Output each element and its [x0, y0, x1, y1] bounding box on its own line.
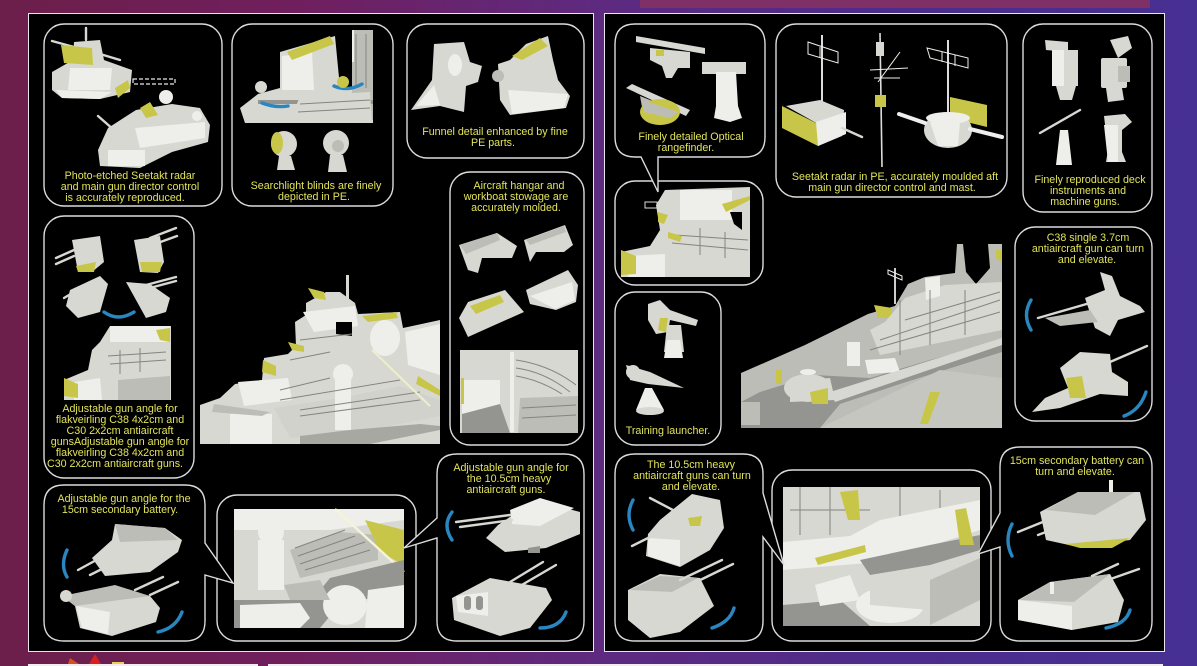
panel: C38 single 3.7cm gun	[1015, 227, 1152, 421]
caption: flakveirling C38 4x2cm and	[56, 414, 184, 426]
caption: 15cm secondary battery can	[1010, 455, 1144, 467]
icon: red star badge	[68, 654, 124, 665]
panel: deck instruments	[1023, 24, 1152, 212]
caption: turn and elevate.	[1035, 466, 1115, 478]
image: instruments	[1040, 36, 1132, 165]
caption: Searchlight blinds are finely	[251, 180, 382, 192]
panel: center close-up	[217, 495, 416, 641]
panel: 15cm battery turn and elevate	[978, 447, 1152, 641]
caption: antiaircraft guns.	[466, 484, 546, 496]
panel: superstructure close-up	[615, 181, 763, 285]
image: launcher	[626, 300, 698, 415]
panel: left page	[28, 14, 594, 652]
image: deck close-up	[783, 487, 980, 626]
image: rangefinders	[626, 36, 746, 125]
caption: instruments and	[1050, 185, 1126, 197]
icon: blue arrows	[629, 500, 734, 628]
icon: blue arrows	[1008, 524, 1130, 628]
icon: blue arrows	[1026, 300, 1146, 416]
image: main gun director	[52, 28, 175, 99]
image: gun mounts	[628, 494, 733, 638]
icon: blue arrows	[64, 550, 182, 632]
image: hangar parts	[459, 225, 578, 337]
image: guns	[1032, 272, 1147, 412]
caption: workboat stowage are	[463, 191, 568, 203]
caption: The 10.5cm heavy	[647, 459, 736, 471]
caption: Seetakt radar in PE, accurately moulded aft	[792, 171, 998, 183]
panel: 10.5cm heavy antiaircraft guns	[404, 454, 584, 641]
caption: Adjustable gun angle for	[453, 462, 569, 474]
image: flak gun set	[56, 228, 177, 318]
caption: flakveirling C38 4x2cm and	[56, 447, 184, 459]
caption: antiaircraft gun can turn	[1032, 243, 1144, 255]
caption: antiaircraft guns can turn	[633, 470, 751, 482]
image: turrets	[1018, 480, 1146, 630]
panel: adjustable flak guns	[44, 216, 194, 478]
image: tower close-up	[64, 326, 171, 400]
caption: and elevate.	[662, 481, 720, 493]
panel: center close-up right	[772, 470, 991, 641]
caption: C38 single 3.7cm	[1047, 232, 1129, 244]
panel: Seetakt radar and mast	[776, 24, 1007, 197]
caption: and main gun director control	[61, 181, 199, 193]
caption: depicted in PE.	[278, 191, 350, 203]
caption: Funnel detail enhanced by fine	[422, 126, 568, 138]
caption: gunsAdjustable gun angle for	[51, 436, 190, 448]
image: two searchlights	[271, 130, 349, 172]
image: forward tower	[98, 90, 210, 168]
panel: optical rangefinder	[615, 24, 765, 192]
bottom boxes	[28, 664, 1163, 666]
image: aft director left	[782, 35, 862, 146]
caption: C30 2x2cm antiaircraft	[67, 425, 173, 437]
hero image: aft superstructure	[741, 244, 1002, 428]
caption: Training launcher.	[626, 425, 710, 437]
panel: Seetakt radar and gun director	[44, 24, 222, 206]
caption: Photo-etched Seetakt radar	[65, 170, 196, 182]
panel: right page	[604, 14, 1164, 652]
image: gun mounts	[452, 498, 580, 636]
panel: 15cm secondary battery	[44, 485, 233, 641]
panel: searchlight blinds	[232, 24, 393, 206]
caption: Aircraft hangar and	[474, 180, 564, 192]
image: center mast	[870, 33, 908, 167]
caption: C30 2x2cm antiaircraft guns.	[47, 458, 183, 470]
icon: blue arrows	[447, 512, 566, 628]
image: superstructure	[621, 187, 750, 277]
caption: main gun director control and mast.	[808, 182, 976, 194]
caption: Finely detailed Optical	[638, 131, 744, 143]
panel: 10.5cm guns turn and elevate	[615, 454, 784, 641]
image: two funnels	[411, 36, 570, 115]
image: funnel platform with blue arrows	[240, 30, 373, 123]
caption: machine guns.	[1050, 196, 1120, 208]
caption: Adjustable gun angle for	[62, 403, 178, 415]
panel: training launcher	[615, 292, 721, 445]
caption: rangefinder.	[658, 142, 714, 154]
hero image: battleship forward tower	[200, 275, 440, 444]
image: hangar close-up	[460, 350, 578, 433]
panel: aircraft hangar	[450, 172, 584, 445]
caption: the 10.5cm heavy	[467, 473, 552, 485]
image: aft director right	[899, 40, 1002, 148]
caption: 15cm secondary battery.	[62, 504, 178, 516]
caption: Finely reproduced deck	[1034, 174, 1146, 186]
image: close-up of deck	[234, 509, 404, 628]
caption: accurately molded.	[471, 202, 561, 214]
image: turrets	[60, 524, 182, 636]
caption: is accurately reproduced.	[65, 192, 185, 204]
caption: Adjustable gun angle for the	[57, 493, 191, 505]
caption: PE parts.	[471, 137, 515, 149]
caption: and elevate.	[1058, 254, 1116, 266]
panel: funnel detail	[407, 24, 584, 158]
